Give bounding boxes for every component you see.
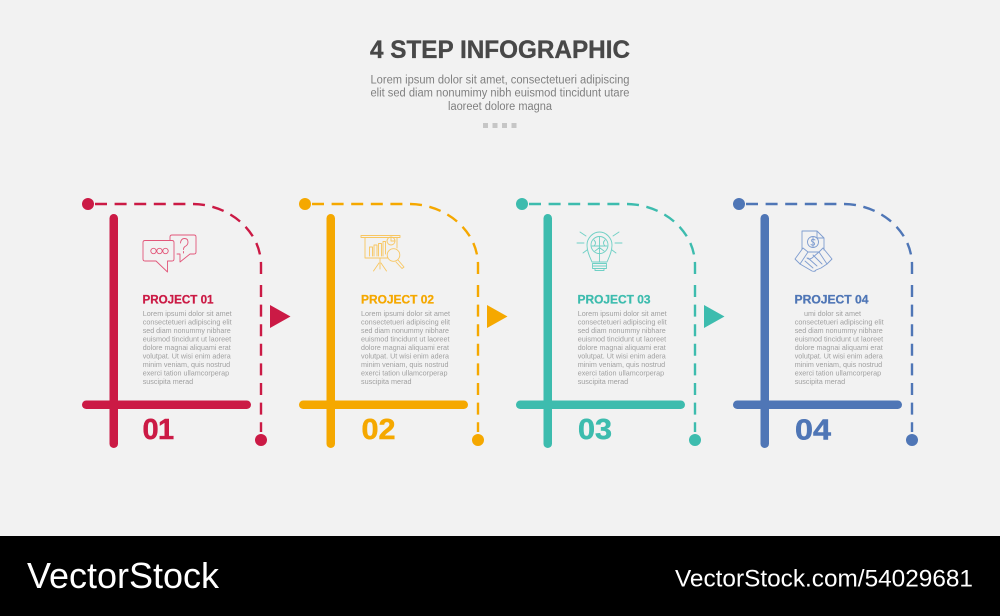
body text 01 [143, 309, 232, 386]
end dot 01 [255, 434, 267, 446]
end dot 03 [689, 434, 701, 446]
body text 01: Lorem ipsumi dolor sit amet [143, 309, 232, 318]
body text 04: dolore magnai aliquami erat [795, 343, 883, 352]
end dot 04 [906, 434, 918, 446]
body text 03: Lorem ipsumi dolor sit amet [578, 309, 667, 318]
panel: project 01 [82, 198, 290, 448]
body text 04: volutpat. Ut wisi enim adera [795, 352, 884, 361]
footer logo text: VectorStock [27, 555, 220, 596]
body text 01: sed diam nonummy nibhare [143, 326, 231, 335]
heading 02: PROJECT 02 [361, 292, 434, 306]
body text 01: euismod tincidunt ut laoreet [143, 334, 231, 344]
horizontal bar 02 [299, 400, 468, 409]
body text 03: exerci tation ullamcorperap [578, 369, 664, 378]
body text 02: consectetueri adipiscing elit [361, 317, 450, 326]
body text 01: suscipita merad [143, 377, 193, 386]
title: 4 STEP INFOGRAPHIC [370, 36, 630, 64]
number 01: 01 [142, 414, 174, 446]
body text 01: consectetueri adipiscing elit [143, 317, 232, 326]
heading 03: PROJECT 03 [578, 292, 651, 306]
vertical bar 03 [544, 214, 552, 448]
body text 04 [795, 309, 884, 386]
body text 04: suscipita merad [795, 377, 845, 386]
body text 04: exerci tation ullamcorperap [795, 369, 881, 378]
icon: light bulb with brain [577, 232, 622, 270]
body text 03: minim veniam, quis nostrud [578, 360, 665, 369]
number 02: 02 [362, 414, 396, 446]
body text 02 [361, 309, 450, 386]
icon: document and handshake [795, 231, 832, 271]
vertical bar 01 [110, 214, 118, 448]
subtitle text: elit sed diam nonumimy nibh euismod tincidunt utare [370, 88, 630, 100]
end dot 02 [472, 434, 484, 446]
vertical bar 04 [760, 214, 769, 448]
body text 02: euismod tincidunt ut laoreet [361, 334, 450, 344]
body text 01: minim veniam, quis nostrud [143, 360, 230, 369]
number 03: 03 [578, 414, 612, 446]
arrow 03 [704, 305, 724, 328]
body text 04: umi dolor sit amet [804, 309, 861, 318]
icon: speech bubbles [143, 235, 196, 272]
footer url text: VectorStock.com/54029681 [675, 566, 973, 592]
body text 02: exerci tation ullamcorperap [361, 369, 448, 378]
arrow 01 [270, 305, 290, 328]
subtitle text: Lorem ipsum dolor sit amet, consectetueri adipiscing [370, 74, 630, 86]
body text 04: minim veniam, quis nostrud [795, 360, 882, 369]
body text 02: Lorem ipsumi dolor sit amet [361, 309, 450, 318]
subtitle text [370, 74, 630, 113]
panel: project 04 [733, 198, 918, 448]
icon: presentation board with magnifier [361, 236, 404, 271]
body text 02: minim veniam, quis nostrud [361, 360, 448, 369]
body text 04: euismod tincidunt ut laoreet [795, 334, 883, 344]
start dot 04 [733, 198, 745, 210]
heading 04: PROJECT 04 [794, 292, 869, 306]
title dots [483, 123, 516, 128]
body text 03 [578, 309, 667, 386]
body text 03: volutpat. Ut wisi enim adera [578, 352, 667, 361]
watermark footer [0, 536, 1000, 616]
subtitle text: laoreet dolore magna [448, 101, 553, 113]
body text 04: sed diam nonummy nibhare [795, 326, 883, 335]
body text 03: dolore magnai aliquami erat [578, 343, 666, 352]
body text 02: volutpat. Ut wisi enim adera [361, 352, 450, 361]
number 04: 04 [795, 414, 831, 446]
body text 02: sed diam nonummy nibhare [361, 326, 449, 335]
body text 01: exerci tation ullamcorperap [143, 369, 229, 378]
body text 02: dolore magnai aliquami erat [361, 343, 449, 352]
body text 03: consectetueri adipiscing elit [578, 317, 667, 326]
arrow 02 [487, 305, 508, 328]
horizontal bar 01 [82, 400, 251, 409]
dashed rounded outline 01 [95, 204, 261, 432]
panel: project 02 [299, 198, 508, 448]
body text 04: consectetueri adipiscing elit [795, 317, 884, 326]
horizontal bar 04 [733, 400, 902, 409]
vertical bar 02 [326, 214, 335, 448]
start dot 01 [82, 198, 94, 210]
body text 02: suscipita merad [361, 377, 412, 386]
dashed rounded outline 03 [529, 204, 695, 432]
start dot 02 [299, 198, 311, 210]
panel: project 03 [516, 198, 724, 448]
body text 01: dolore magnai aliquami erat [143, 343, 231, 352]
body text 03: euismod tincidunt ut laoreet [578, 334, 666, 344]
dashed rounded outline 04 [746, 204, 912, 432]
body text 03: sed diam nonummy nibhare [578, 326, 666, 335]
heading 01: PROJECT 01 [142, 292, 214, 306]
dashed rounded outline 02 [312, 204, 478, 432]
body text 01: volutpat. Ut wisi enim adera [143, 352, 232, 361]
horizontal bar 03 [516, 400, 685, 409]
body text 03: suscipita merad [578, 377, 628, 386]
start dot 03 [516, 198, 528, 210]
